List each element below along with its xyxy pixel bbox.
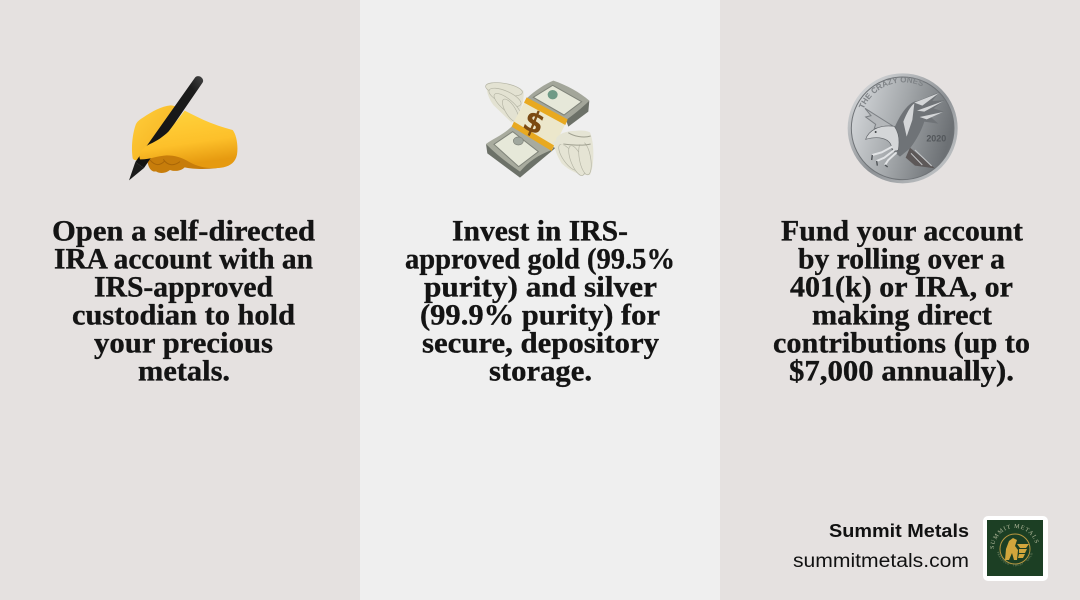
heading: step 1 text: custodian to hold bbox=[72, 298, 295, 332]
heading: step 1 text: metals. bbox=[138, 354, 230, 388]
logo: Summit Metals badge bbox=[983, 516, 1048, 581]
heading: step 3 text: by rolling over a bbox=[798, 242, 1005, 276]
logo: Summit Metals badge: PRECIOUS · TRUST · GOLD bbox=[997, 552, 1032, 566]
heading: step 1 text: your precious bbox=[94, 326, 273, 360]
heading: step 2 text bbox=[405, 214, 675, 388]
heading: step 2 text: (99.9% purity) for bbox=[420, 298, 660, 332]
heading: step 1 text: IRA account with an bbox=[54, 242, 313, 276]
heading: step 1 text bbox=[52, 214, 315, 388]
heading: step 3 text: contributions (up to bbox=[773, 326, 1030, 360]
heading: step 2 text: storage. bbox=[489, 354, 592, 388]
panel: step 1 background bbox=[0, 0, 360, 600]
icon detail: pen bbox=[129, 76, 203, 180]
icon detail: right wing bbox=[553, 130, 593, 178]
heading: step 3 text: $7,000 annually). bbox=[789, 354, 1014, 388]
icon: money with wings bbox=[485, 80, 593, 178]
brand url: summitmetals.com bbox=[793, 551, 969, 572]
icon detail: eagle bbox=[865, 92, 944, 168]
heading: step 3 text: making direct bbox=[812, 298, 992, 332]
heading: step 3 text: 401(k) or IRA, or bbox=[790, 270, 1013, 304]
icon: silver eagle coin bbox=[848, 73, 958, 184]
heading: step 2 text: purity) and silver bbox=[424, 270, 657, 304]
heading: step 3 text: Fund your account bbox=[781, 214, 1023, 248]
icon detail: bill stack bbox=[486, 81, 589, 178]
icon detail: coin year: 2020 bbox=[926, 134, 946, 144]
heading: step 1 text: IRS-approved bbox=[94, 270, 273, 304]
heading: step 3 text bbox=[773, 214, 1030, 388]
panel: step 2 background bbox=[360, 0, 720, 600]
heading: step 2 text: Invest in IRS- bbox=[452, 214, 628, 248]
icon detail: paper band: $ bbox=[518, 103, 550, 142]
heading: step 2 text: secure, depository bbox=[422, 326, 659, 360]
panel: step 3 background bbox=[720, 0, 1080, 600]
heading: step 1 text: Open a self-directed bbox=[52, 214, 315, 248]
icon: writing hand bbox=[129, 76, 237, 180]
icon detail: left wing bbox=[485, 80, 524, 125]
brand name: Summit Metals bbox=[829, 521, 969, 541]
icon detail: coin legend: THE CRAZY ONES bbox=[858, 77, 924, 108]
logo: Summit Metals badge: SUMMIT METALS bbox=[990, 524, 1039, 549]
heading: step 2 text: approved gold (99.5% bbox=[405, 242, 675, 276]
